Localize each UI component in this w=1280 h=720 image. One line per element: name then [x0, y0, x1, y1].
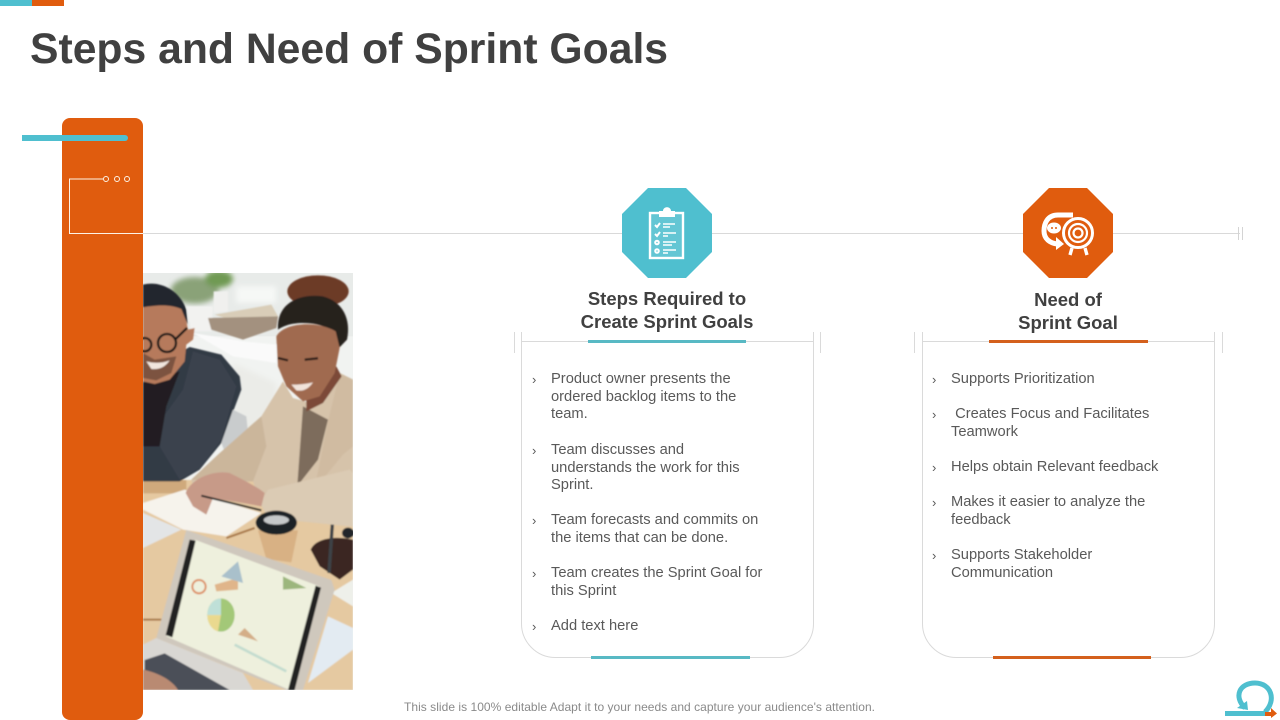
bullet list: need: Supports Prioritization: [951, 371, 1095, 387]
teal sidebar bar: [22, 135, 128, 141]
heading: need of sprint goal: [1018, 289, 1118, 333]
bullet list: steps: ›: [532, 619, 536, 634]
bullet list: steps: Sprint.: [551, 477, 593, 493]
bullet list: steps: ordered backlog items to the: [551, 389, 736, 405]
heading: steps required: Steps Required to: [588, 288, 746, 309]
bullet list: steps: Team creates the Sprint Goal for: [551, 565, 762, 581]
bullet list: steps: this Sprint: [551, 583, 616, 599]
photo: team around laptop: [143, 273, 353, 690]
chair: [220, 408, 248, 450]
bullet list: steps: Team forecasts and commits on: [551, 512, 758, 528]
bullet list: steps: ›: [532, 372, 536, 387]
hands and notebook: [143, 490, 261, 536]
timeline connector line: [143, 233, 1240, 234]
bullet list: steps: ›: [532, 443, 536, 458]
bullet list: steps: Team discusses and: [551, 442, 684, 458]
bullet list: need: Supports Stakeholder: [951, 547, 1092, 563]
bullet list: steps: ›: [532, 513, 536, 528]
panel: need of sprint goal: [914, 188, 1223, 659]
heading: steps required: Create Sprint Goals: [581, 311, 753, 332]
panel frame: [514, 332, 821, 659]
laptop: [143, 638, 253, 690]
title: Steps and Need of Sprint Goals: [30, 25, 668, 73]
panel: steps required: [514, 188, 821, 659]
bullet list: need: ›: [932, 495, 936, 510]
panel frame: [914, 332, 1223, 659]
bullet list: need: Helps obtain Relevant feedback: [951, 459, 1158, 475]
bullet list: steps: ›: [532, 566, 536, 581]
bullet list: need: feedback: [951, 512, 1011, 528]
sidebar connector with dots: [69, 176, 143, 234]
icon: target with feedback arrow: [1023, 188, 1113, 278]
bullet list: steps: [532, 371, 762, 634]
bullet list: need: ›: [932, 548, 936, 563]
footer note: This slide is 100% editable Adapt it to your needs and capture your audience's attention.: [404, 700, 875, 714]
bullet list: steps: Add text here: [551, 618, 638, 634]
bullet list: need: Communication: [951, 565, 1053, 581]
bullet list: need: [932, 371, 1158, 581]
orange sidebar: [62, 118, 143, 720]
icon: loop arrow logo: [1225, 680, 1277, 718]
bullet list: need: ›: [932, 372, 936, 387]
bullet list: need: Creates Focus and Facilitates: [955, 406, 1149, 422]
bullet list: steps: Product owner presents the: [551, 371, 731, 387]
top corner accent: [0, 0, 64, 6]
woman head: [306, 366, 342, 411]
bullet list: steps: the items that can be done.: [551, 530, 728, 546]
heading: need of sprint goal: Need of: [1034, 289, 1102, 310]
man: [143, 347, 241, 481]
bullet list: need: ›: [932, 460, 936, 475]
heading: steps required: [581, 288, 753, 332]
table: [143, 480, 353, 690]
bullet list: steps: team.: [551, 406, 588, 422]
icon: clipboard checklist: [622, 188, 712, 278]
heading: need of sprint goal: Sprint Goal: [1018, 312, 1118, 333]
bullet list: need: Teamwork: [951, 424, 1018, 440]
woman jacket: [192, 381, 353, 494]
hand with pen: [342, 528, 354, 538]
bullet list: steps: understands the work for this: [551, 460, 740, 476]
bullet list: need: Makes it easier to analyze the: [951, 494, 1145, 510]
bullet list: need: ›: [932, 407, 936, 422]
timeline end mark: [1238, 227, 1243, 240]
coffee cup: [258, 530, 298, 562]
